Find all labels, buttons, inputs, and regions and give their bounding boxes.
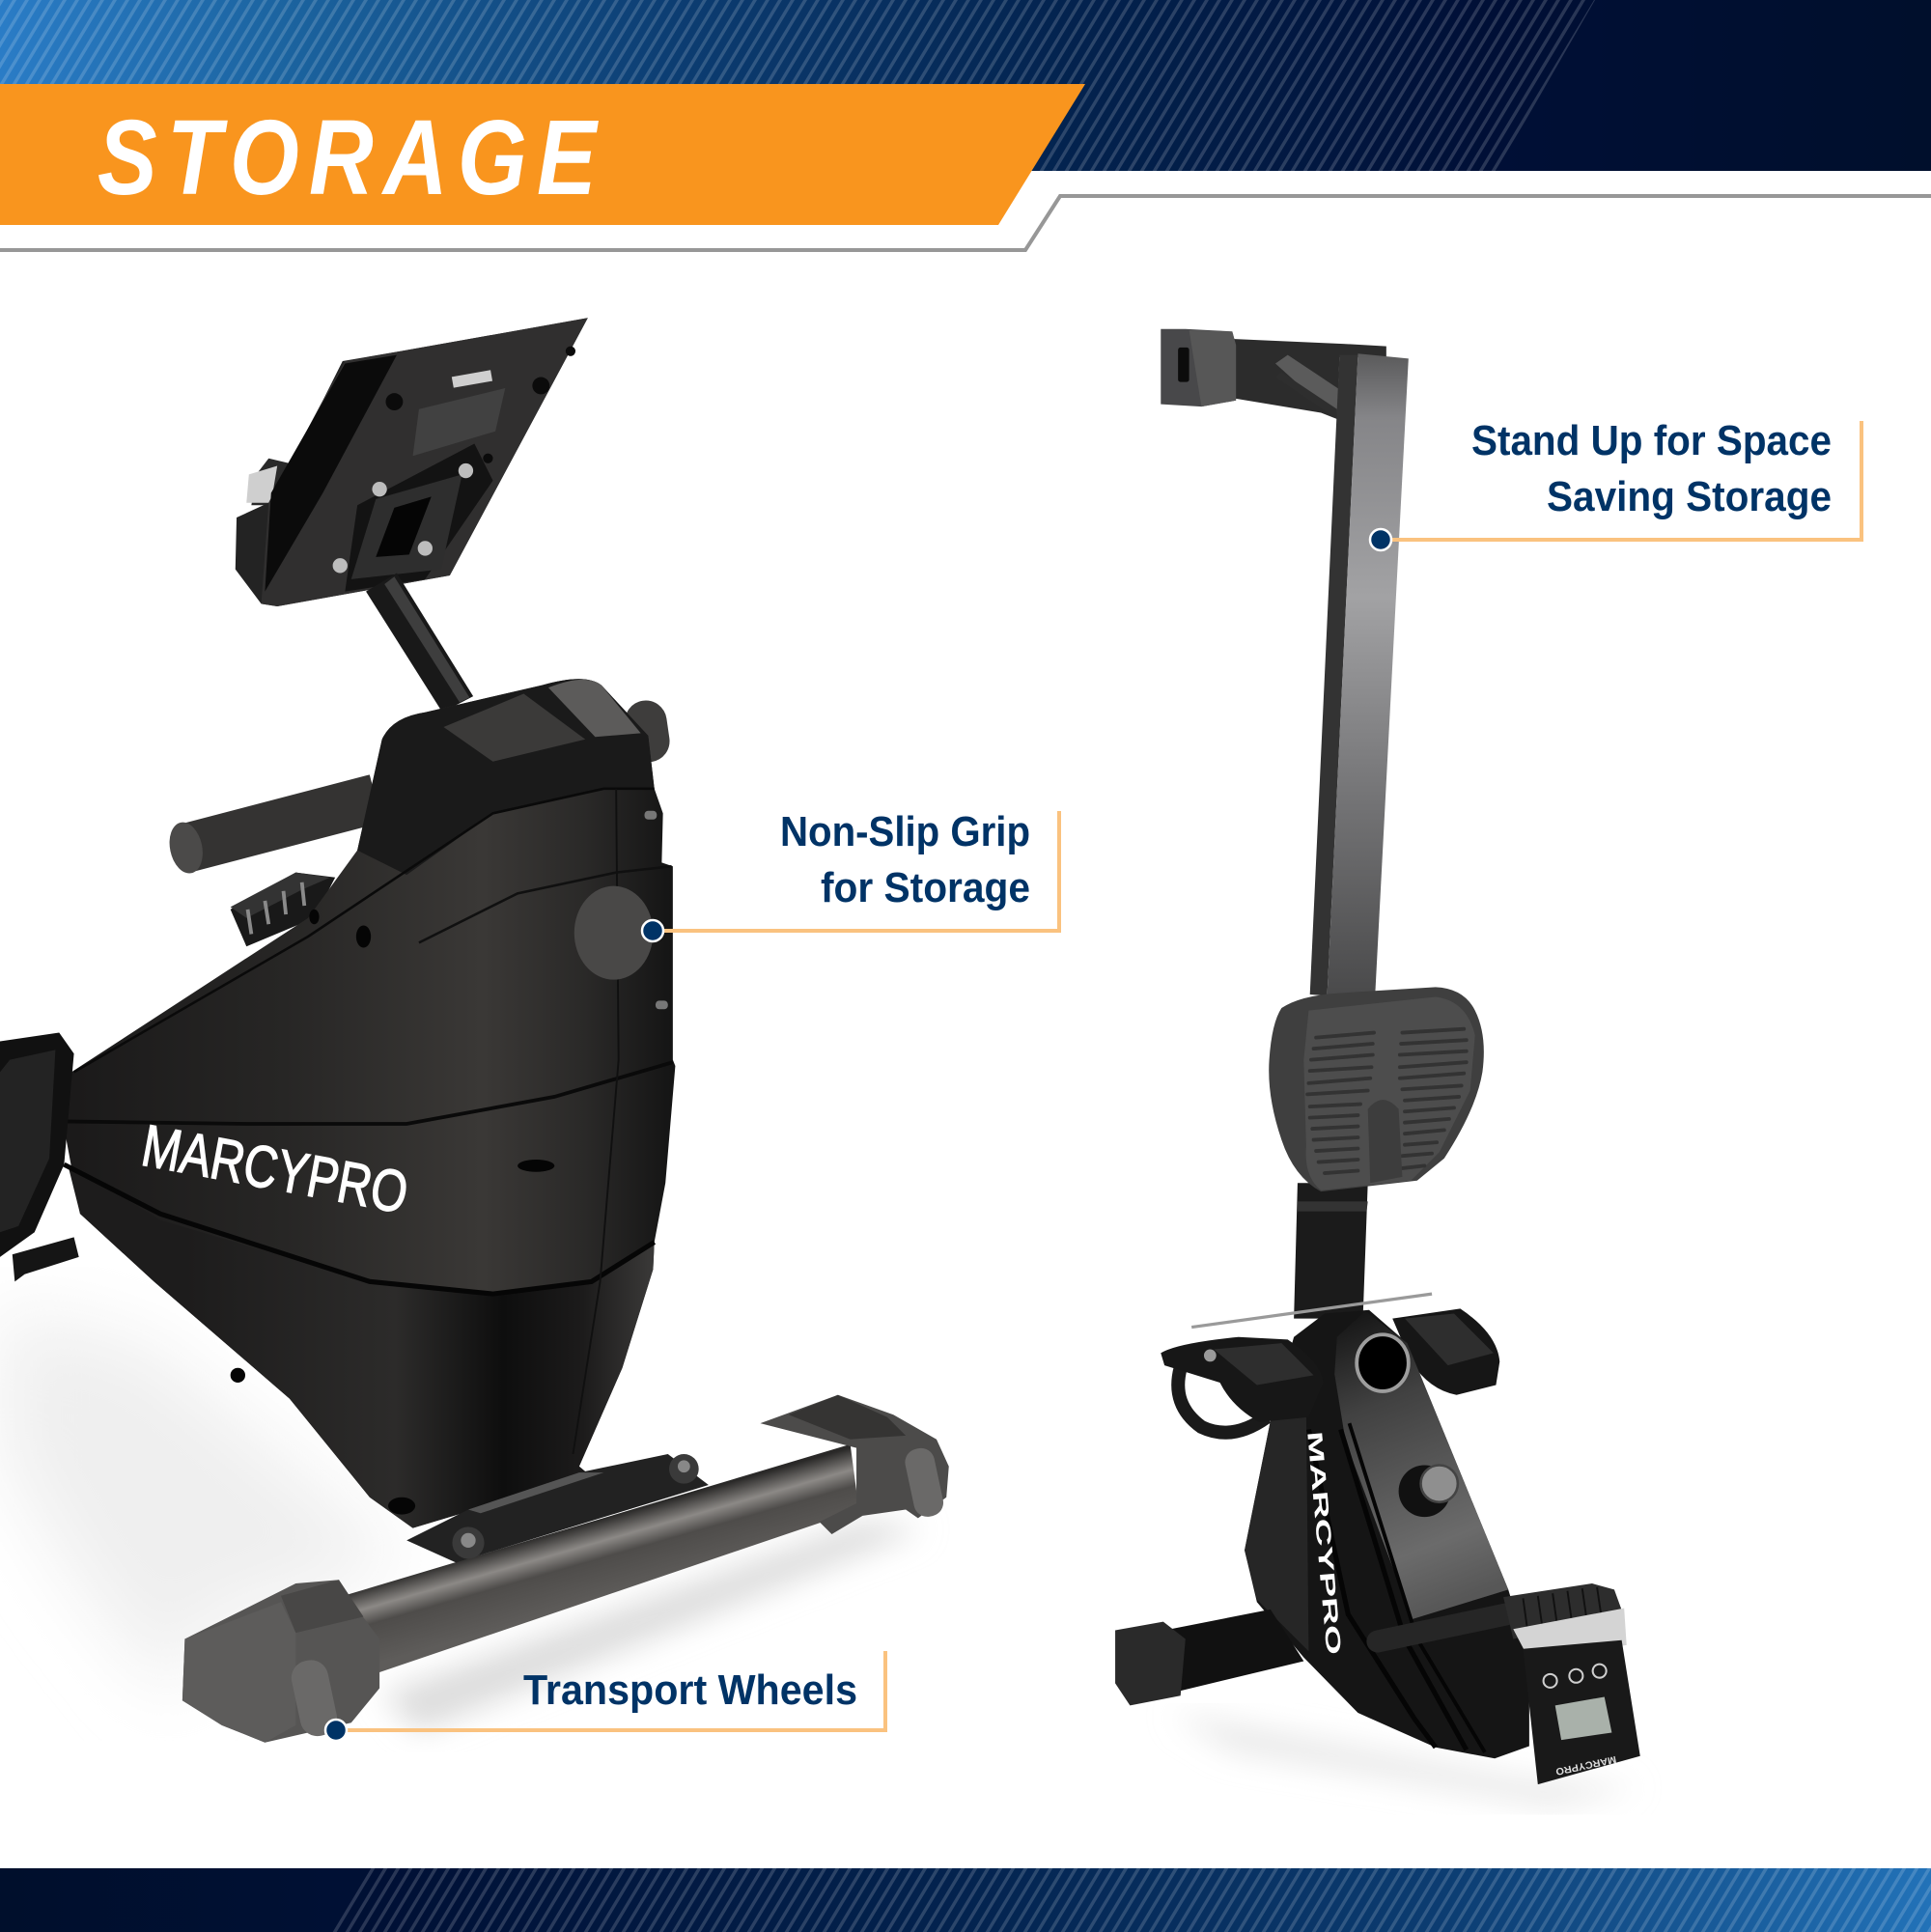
comb ribs	[1524, 1587, 1602, 1634]
monitor assembly	[1503, 1583, 1640, 1784]
holes	[356, 926, 371, 947]
left end cap	[182, 1580, 379, 1743]
callout text: Transport Wheels	[523, 1666, 857, 1714]
title: STORAGE	[98, 98, 600, 217]
right machine: upright storage position	[1115, 329, 1640, 1806]
callout dot	[642, 920, 663, 941]
stabilizer tube	[322, 1444, 859, 1672]
callout dot	[1370, 529, 1391, 550]
left base foot	[1115, 1610, 1303, 1705]
monitor brand mark: MARCYPRO	[1554, 1753, 1617, 1777]
pad ribs	[1307, 1029, 1467, 1173]
callout: transport wheels	[325, 1651, 885, 1741]
tablet holder	[236, 318, 588, 606]
seat slide handle	[1378, 1614, 1506, 1641]
floor shadow	[1170, 1713, 1638, 1806]
callout text: Non-Slip Grip	[780, 808, 1030, 855]
mode buttons	[1544, 1665, 1607, 1688]
strap	[1178, 1368, 1267, 1433]
top header band	[0, 0, 1931, 171]
axle rod	[1191, 1294, 1432, 1328]
lower post	[1294, 1183, 1368, 1319]
upper hump	[357, 679, 655, 875]
mounting plate	[406, 1454, 709, 1562]
front seat fragment	[0, 1033, 79, 1281]
callout: stand up for space saving storage	[1370, 417, 1861, 550]
brand mark: MARCYPRO	[137, 1112, 413, 1226]
orange title banner	[0, 84, 1085, 225]
header white separator and grey rule	[0, 171, 1931, 250]
rear peg	[639, 721, 655, 742]
flywheel port	[1357, 1334, 1409, 1391]
panel seams	[74, 789, 655, 1072]
rear foot pedal	[1392, 1308, 1499, 1395]
tension knob	[1399, 1466, 1450, 1517]
upright column	[1310, 353, 1409, 995]
resistance knob	[231, 873, 335, 946]
grey face	[1334, 1311, 1508, 1619]
lower housing shade	[68, 1164, 655, 1528]
callout text: Stand Up for Space	[1471, 417, 1832, 464]
black bands	[1308, 1430, 1436, 1748]
mount pole	[366, 573, 473, 713]
vertical brand mark: MARCYPRO	[1302, 1430, 1346, 1656]
machine side housing	[1245, 1310, 1529, 1758]
callout: non-slip grip for storage: for Storage	[821, 864, 1030, 911]
round grip pad	[574, 886, 653, 980]
cross bar	[1232, 339, 1386, 419]
main housing	[64, 679, 675, 1528]
floor shadow	[0, 1306, 924, 1731]
callout dot	[325, 1720, 347, 1741]
left machine: close-up of rower	[0, 318, 949, 1743]
callout: non-slip grip for storage	[642, 808, 1059, 941]
front foot pedal	[1161, 1337, 1324, 1422]
end cap	[1161, 329, 1236, 406]
foot pad	[1269, 987, 1484, 1191]
callout: stand up for space saving storage: Saving Storage	[1547, 473, 1832, 520]
grip handle	[165, 798, 376, 877]
bottom footer band	[0, 1868, 1931, 1932]
display screen	[1555, 1696, 1611, 1740]
right end cap	[760, 1395, 949, 1534]
